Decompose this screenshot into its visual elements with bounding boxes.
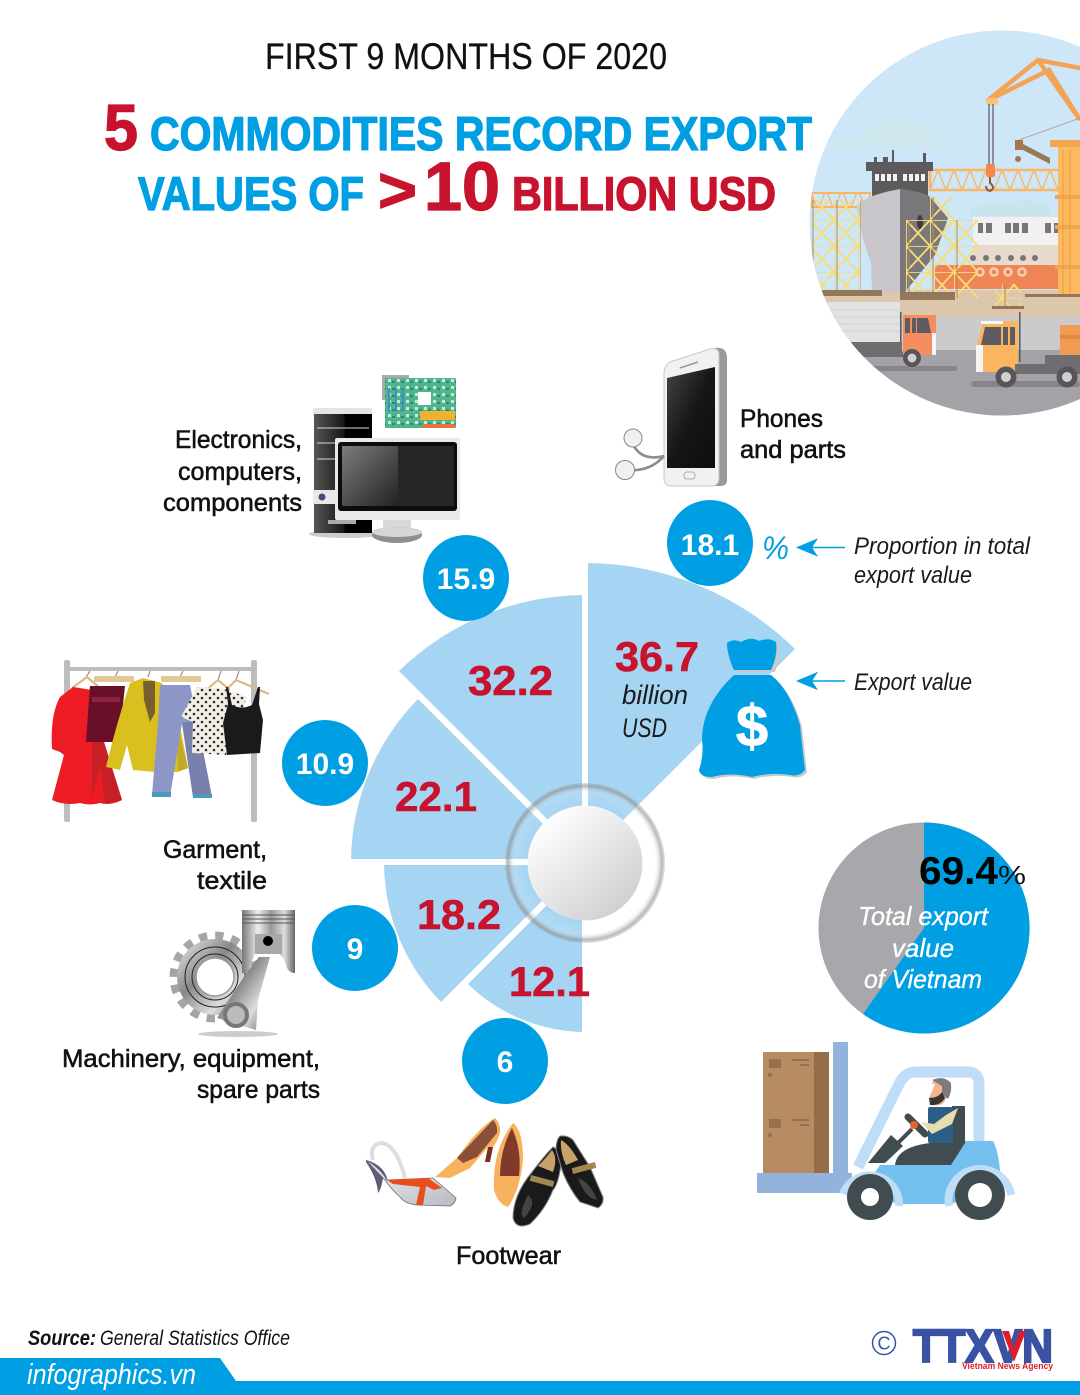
legend: proportion in total export value	[854, 533, 1031, 589]
wedge: garment	[351, 699, 578, 859]
chart hub: glass ring	[505, 783, 665, 943]
unit: billion USD	[622, 680, 688, 743]
wedge: machinery	[384, 865, 578, 1002]
pie chart: share of total export value: 69.4	[919, 850, 998, 893]
chart hub: centre disc	[528, 806, 642, 920]
percent sign for phones: %	[762, 530, 789, 566]
legend: proportion in total export value: export value	[854, 562, 972, 589]
label: phones: Phones	[740, 405, 823, 433]
arrow: to export value	[798, 674, 845, 688]
bubble: phones 18.1	[667, 500, 753, 586]
unit: billion USD: USD	[622, 713, 667, 743]
arrow: to proportion	[798, 540, 845, 555]
bubble: phones 18.1: 18.1	[681, 529, 739, 562]
pie chart: share of total export value: Total export	[858, 901, 990, 931]
logo: copyright mark	[872, 1332, 896, 1354]
value: phones 36.7: 36.7	[615, 633, 699, 680]
label: electronics: components	[163, 489, 302, 517]
icon: money bag	[699, 639, 807, 779]
bubble: machinery 9	[312, 905, 398, 991]
value: electronics 32.2: 32.2	[468, 657, 553, 704]
label: machinery: spare parts	[197, 1076, 320, 1104]
value: garment 22.1: 22.1	[395, 773, 477, 820]
title: period line: FIRST 9 MONTHS OF 2020	[265, 36, 667, 77]
pie chart: share of total export value: of Vietnam	[864, 964, 982, 994]
icon: gear and piston	[175, 910, 295, 1037]
bubble: electronics 15.9: 15.9	[437, 563, 495, 596]
label: phones	[740, 405, 846, 464]
title: headline	[104, 91, 812, 226]
bubble: garment 10.9	[282, 720, 368, 806]
bubble: electronics 15.9	[423, 535, 509, 621]
source line: Source:	[28, 1327, 96, 1350]
icon: forklift with boxes	[757, 1042, 1011, 1220]
legend: proportion in total export value: Proportion in total	[854, 533, 1031, 560]
wedge: footwear	[468, 870, 582, 1032]
icon: smartphone and earphones	[616, 348, 727, 486]
icon: pairs of shoes	[366, 1118, 603, 1226]
title: headline: VALUES OF	[138, 167, 364, 220]
wedge: electronics	[399, 595, 582, 854]
unit: billion USD: billion	[622, 680, 688, 710]
title: headline: 5	[104, 91, 138, 164]
source line: General Statistics Office	[100, 1327, 290, 1350]
illustration: shipyard port in circle	[800, 20, 1080, 420]
footer: website: infographics.vn	[27, 1359, 196, 1391]
label: garment: Garment,	[163, 836, 267, 864]
label: electronics: computers,	[178, 458, 302, 486]
label: machinery: Machinery, equipment,	[62, 1045, 320, 1073]
label: garment: textile	[197, 867, 267, 895]
title: headline: 10	[424, 148, 500, 225]
icon: money bag: $	[736, 694, 768, 759]
label: phones: and parts	[740, 436, 846, 464]
logo: TTXVN news agency: Vietnam News Agency	[962, 1361, 1054, 1372]
bubble: machinery 9: 9	[347, 933, 363, 966]
pie chart: share of total export value	[818, 822, 1030, 1034]
label: electronics	[163, 426, 302, 517]
label: garment	[163, 836, 267, 895]
icon: clothes on a rack	[52, 660, 269, 822]
title: headline: COMMODITIES RECORD EXPORT	[150, 107, 812, 160]
value: footwear 12.1: 12.1	[509, 958, 590, 1005]
bubble: footwear 6: 6	[497, 1046, 513, 1079]
label: machinery	[62, 1045, 320, 1104]
bubble: garment 10.9: 10.9	[296, 748, 354, 781]
chart: radial export value wedges	[351, 563, 795, 1032]
pie chart: share of total export value: value	[892, 933, 954, 963]
logo: TTXVN news agency: TTXVN	[913, 1320, 1053, 1372]
title: headline: BILLION USD	[512, 167, 776, 220]
pie chart: share of total export value: %	[998, 860, 1026, 890]
value: machinery 18.2: 18.2	[417, 891, 501, 938]
logo: copyright mark: C	[878, 1334, 890, 1354]
label: electronics: Electronics,	[175, 426, 302, 454]
footer band	[0, 1358, 1080, 1395]
source line	[28, 1327, 290, 1350]
legend: export value: Export value	[854, 669, 972, 696]
title: headline: >	[378, 154, 417, 226]
icon: computer, monitor and motherboard	[309, 375, 460, 543]
bubble: footwear 6	[462, 1018, 548, 1104]
label: footwear: Footwear	[456, 1242, 561, 1270]
wedge: phones	[588, 563, 795, 855]
